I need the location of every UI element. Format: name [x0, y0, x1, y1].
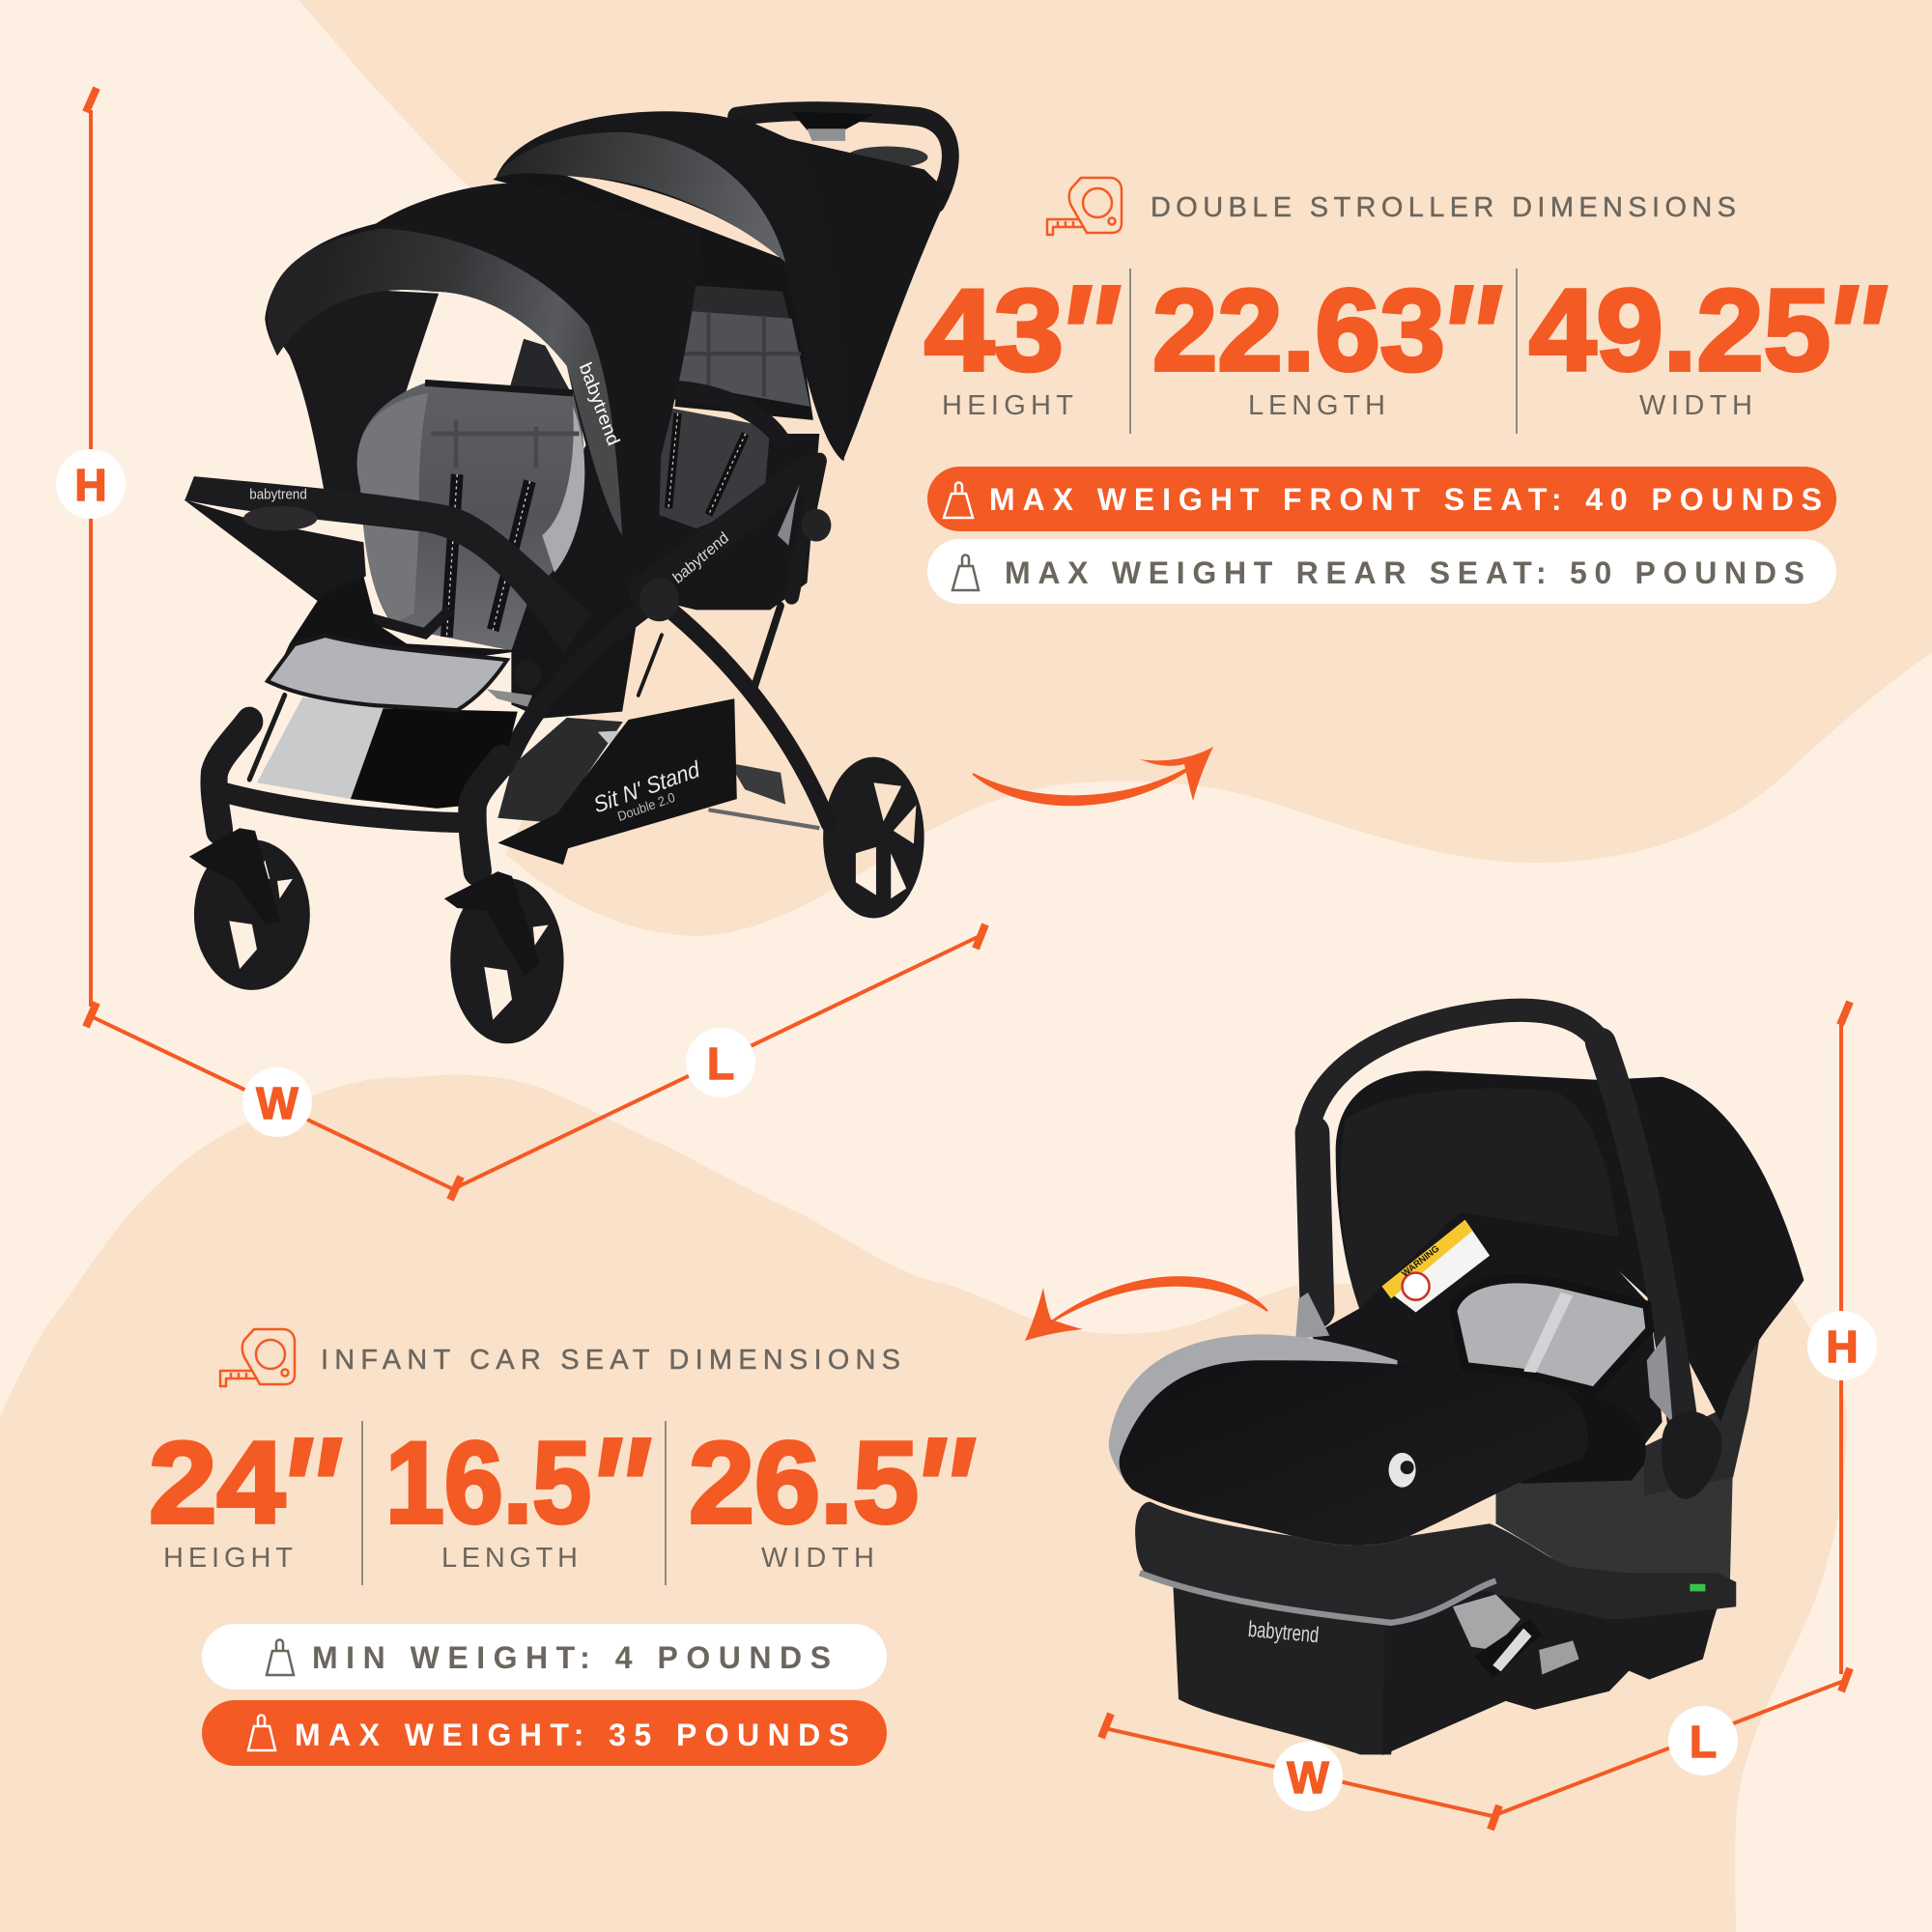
warning label: WARNING [1400, 1243, 1441, 1279]
front seat pad [357, 383, 584, 650]
pill: max weight front seat [927, 467, 1836, 531]
rear canopy underside [493, 159, 813, 420]
heading: DOUBLE STROLLER DIMENSIONS [1151, 192, 1736, 223]
rear wheel [823, 757, 924, 919]
height line bottom tick [86, 1003, 97, 1027]
cover grey rim [1109, 1334, 1397, 1484]
tray holder [184, 499, 366, 603]
heading: INFANT CAR SEAT DIMENSIONS [321, 1345, 900, 1376]
base tray [1135, 1502, 1736, 1622]
canopy logo text: babytrend [575, 359, 623, 449]
under-seat bracket [511, 596, 640, 719]
rear base box [1496, 1459, 1733, 1619]
stroller dimension lines [56, 88, 985, 1200]
stat: height: 43 [924, 266, 1064, 395]
badge W: W [256, 1078, 298, 1128]
base trim [1140, 1573, 1496, 1623]
storage basket body: Sit N' Stand [590, 755, 703, 818]
stat: height [924, 253, 1119, 431]
stat: height [149, 1406, 340, 1583]
cover right gather [1520, 1391, 1646, 1484]
grey side clip [1647, 1336, 1673, 1423]
divider [1516, 269, 1518, 434]
stat: length [385, 1406, 649, 1583]
rear seat bar [668, 389, 783, 443]
canopy [1336, 1070, 1804, 1422]
stat: length: " [1437, 253, 1500, 431]
stat: length: LENGTH [441, 1543, 578, 1574]
badge H: H [74, 460, 107, 510]
stat: width: " [911, 1406, 974, 1583]
badge W [242, 1067, 312, 1137]
stat: width [1529, 253, 1886, 431]
stat: width: " [1823, 253, 1886, 431]
height line [1839, 1022, 1843, 1674]
divider [361, 1421, 363, 1585]
front left wheel [189, 828, 310, 990]
frame pivot hubs: babytrend [669, 528, 732, 587]
front right wheel [444, 871, 564, 1043]
stat: length [1152, 253, 1500, 431]
double stroller illustration [184, 111, 951, 1043]
rear canopy fabric [736, 115, 949, 461]
front tray bar: babytrend [249, 486, 307, 501]
arrow: car seat to dimensions [1025, 1277, 1267, 1341]
rear handlebar [736, 111, 951, 203]
badge L [686, 1028, 755, 1097]
e-grip back shell [1644, 1329, 1761, 1496]
width line [1104, 1728, 1492, 1816]
badge H [1807, 1311, 1877, 1380]
stat: length: LENGTH [1248, 390, 1385, 421]
warning label [1382, 1220, 1490, 1312]
stat: width: 49.25 [1529, 266, 1831, 395]
infant insert [1453, 1279, 1650, 1391]
headrest tag [510, 339, 573, 396]
pill: max weight [202, 1700, 887, 1766]
icon: tape measure [220, 1329, 295, 1386]
belt clip [1453, 1595, 1579, 1678]
pill: max weight rear seat: MAX WEIGHT REAR SEAT: 50 POUNDS [1005, 555, 1804, 590]
corner tick [1491, 1805, 1499, 1830]
stat: width: 26.5 [689, 1418, 919, 1548]
badge L: L [707, 1038, 734, 1089]
pill: max weight: MAX WEIGHT: 35 POUNDS [295, 1718, 849, 1752]
stat: length: " [586, 1406, 649, 1583]
rear seat lower pad [659, 407, 770, 528]
rear canopy grey band [496, 132, 785, 262]
badge H [56, 449, 126, 519]
left handle clip [1295, 1293, 1329, 1339]
divider [665, 1421, 667, 1585]
arrow: stroller to dimensions [973, 747, 1213, 805]
car seat dimension lines [1101, 1002, 1877, 1830]
height line [89, 110, 93, 1007]
panel: infant car seat dimensions [149, 1329, 974, 1766]
frame pivot hubs [639, 485, 831, 621]
top peach blob [298, 0, 1932, 936]
stat: height: 24 [149, 1418, 285, 1548]
height line bottom tick [1841, 1668, 1850, 1691]
badge L: L [1690, 1717, 1717, 1767]
rear axle and footboard [708, 763, 819, 828]
badge H: H [1826, 1321, 1859, 1372]
base brand text: babytrend [1247, 1616, 1320, 1647]
release indicator [1690, 1584, 1705, 1591]
pill: max weight front seat: MAX WEIGHT FRONT SEAT: 40 POUNDS [989, 482, 1822, 517]
height line top tick [86, 88, 97, 112]
handle [1308, 1010, 1687, 1453]
badge L [1668, 1706, 1738, 1776]
front canopy fabric [265, 183, 699, 555]
rear canopy shade band [496, 111, 844, 461]
handle hub [1662, 1411, 1721, 1499]
base box side [1382, 1582, 1718, 1755]
stat: height: HEIGHT [942, 390, 1073, 421]
pill: min weight [202, 1624, 887, 1690]
stat: width: WIDTH [1639, 390, 1752, 421]
corner tick [450, 1177, 461, 1200]
rear seat pad [671, 285, 810, 407]
badge W: W [1287, 1752, 1329, 1803]
front canopy shade band [268, 228, 622, 535]
stat: height: " [1056, 253, 1119, 431]
footrest side bar [487, 689, 532, 707]
height line top tick [1840, 1002, 1850, 1025]
length line [453, 936, 980, 1189]
canopy interior [1341, 1089, 1619, 1311]
width line [91, 1016, 453, 1189]
storage basket body [257, 697, 737, 865]
logo mark [1389, 1453, 1416, 1488]
stat: width [689, 1406, 974, 1583]
stat: length: 16.5 [385, 1418, 591, 1548]
divider [1129, 269, 1131, 434]
seat side fabric [271, 576, 524, 685]
stat: height: HEIGHT [163, 1543, 293, 1574]
left end tick [1101, 1714, 1111, 1738]
front canopy curtain [265, 288, 439, 505]
stat: length: 22.63 [1152, 266, 1445, 395]
stat: height: " [277, 1406, 340, 1583]
far end tick [976, 924, 985, 949]
rear and under-seat dark mass [511, 434, 819, 678]
bottom peach blob [0, 1075, 1847, 1932]
pill: min weight: MIN WEIGHT: 4 POUNDS [312, 1640, 831, 1675]
infant car seat illustration [1109, 1010, 1804, 1755]
base box front [1173, 1570, 1409, 1754]
front tray bar [185, 476, 591, 654]
footrest hub [514, 660, 541, 690]
icon: tape measure [1047, 178, 1122, 235]
panel: double stroller dimensions [924, 178, 1886, 604]
badge W [1273, 1742, 1343, 1811]
main frame tubes [507, 461, 829, 823]
seat shell interior [1311, 1212, 1662, 1477]
footrest pad [268, 636, 507, 710]
front legs and base frame [213, 696, 502, 870]
pill: max weight rear seat [927, 539, 1836, 604]
cover black [1120, 1360, 1588, 1546]
length line [1492, 1681, 1844, 1816]
storage basket body: Double 2.0 [615, 789, 676, 824]
stat: width: WIDTH [761, 1543, 874, 1574]
